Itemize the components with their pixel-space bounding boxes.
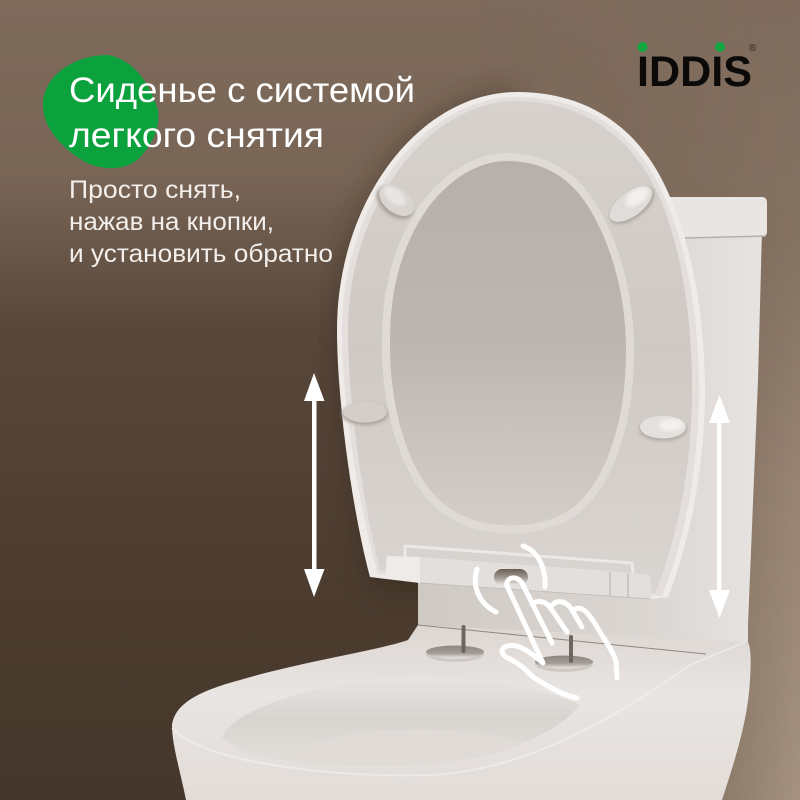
seat underside face bbox=[348, 101, 692, 594]
release button bbox=[494, 569, 528, 585]
press arc right bbox=[523, 546, 545, 587]
press arc left bbox=[475, 569, 496, 612]
arrow: left double-headed bbox=[304, 373, 324, 597]
bowl recess bbox=[222, 678, 580, 767]
left post bbox=[426, 625, 484, 662]
heading: легкого снятия bbox=[69, 116, 324, 155]
description text bbox=[69, 176, 333, 268]
seat centre panel bbox=[386, 157, 630, 529]
arrow: right double-headed bbox=[709, 395, 730, 618]
bumper top left bbox=[370, 177, 421, 226]
raised toilet seat bbox=[337, 92, 705, 599]
heading bbox=[69, 71, 415, 155]
description text: Просто снять, bbox=[69, 176, 241, 204]
bumper bottom left bbox=[342, 402, 388, 425]
description text: и установить обратно bbox=[69, 240, 333, 268]
toilet bowl bbox=[172, 625, 751, 800]
seat rim bbox=[337, 92, 705, 599]
icon: pressing hand bbox=[475, 546, 617, 698]
heading: Сиденье с системой bbox=[69, 71, 415, 110]
hinge posts bbox=[426, 625, 593, 672]
right post bbox=[535, 635, 593, 672]
bumper bottom right bbox=[639, 416, 687, 441]
toilet tank bbox=[418, 197, 767, 650]
green accent blob bbox=[43, 55, 158, 168]
bumper top right bbox=[603, 179, 660, 231]
description text: нажав на кнопки, bbox=[69, 208, 274, 236]
seat rim inner ridge bbox=[342, 97, 699, 596]
quick-release hinge bar bbox=[385, 546, 652, 599]
logo: IDDIS: IDDIS bbox=[637, 48, 752, 96]
logo: IDDIS: ® bbox=[749, 43, 757, 54]
water bbox=[275, 730, 525, 766]
